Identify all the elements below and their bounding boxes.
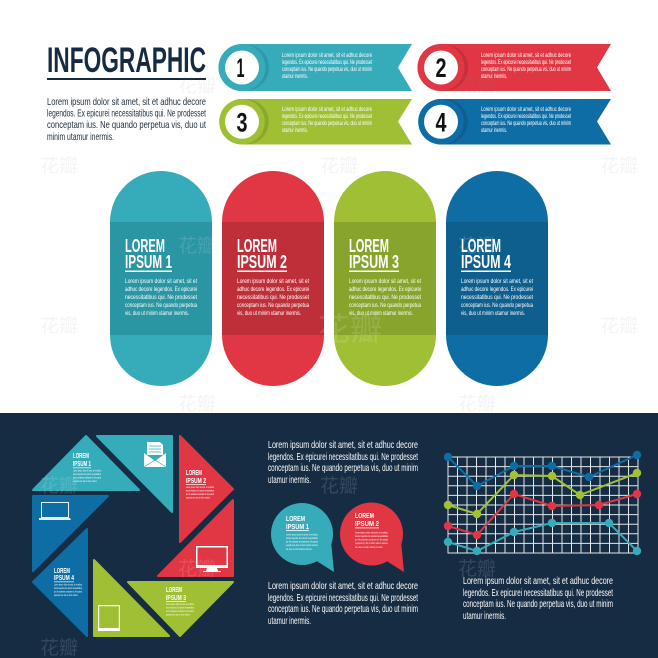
dark panel text block bottom: utamur inermis. xyxy=(268,616,311,627)
ribbon 2: 2 xyxy=(436,53,446,83)
dark panel text block bottom xyxy=(268,581,418,627)
watermarks on colour and dark: 花瓣 xyxy=(458,235,496,257)
segment: red with monitor xyxy=(158,500,233,576)
segment: green with label: qui. Ne prodesset conceptam ius. Ne quando xyxy=(166,609,194,613)
pill 4: LOREM xyxy=(461,236,501,256)
pill 1: vis, duo ut minim utamur inermis. xyxy=(125,311,189,317)
watermarks on colour and dark: 花瓣 xyxy=(458,558,496,580)
watermarks on colour and dark: 花瓣 xyxy=(320,475,358,497)
segment: teal with label: decore legendos. Ex epicurei necessitatibus xyxy=(73,472,101,476)
pill 2: vis, duo ut minim utamur inermis. xyxy=(237,311,301,317)
watermarks on colour and dark: 花瓣 xyxy=(40,475,78,497)
ribbon 4: conceptam ius. Ne quando perpetua vis, duo ut minim xyxy=(481,121,571,127)
segment: red with label: decore legendos. Ex epicurei necessitatibus xyxy=(186,488,214,492)
dark panel text block top: Lorem ipsum dolor sit amet, sit et adhuc decore xyxy=(268,440,418,451)
segment: blue with label: qui. Ne prodesset conceptam ius. Ne quando xyxy=(54,590,82,594)
speech bubble 1: Lorem ipsum dolor sit amet, sit et adhuc xyxy=(286,532,318,536)
watermarks on colour and dark: 花瓣 xyxy=(318,311,382,347)
icon: monitor xyxy=(196,546,228,572)
pill 1: necessitatibus qui. Ne prodesset xyxy=(125,295,197,301)
pill 2: IPSUM 2 xyxy=(237,252,287,272)
title: INFOGRAPHIC xyxy=(47,41,206,80)
speech bubble 2: Lorem ipsum dolor sit amet, sit et adhuc xyxy=(355,530,388,534)
series: teal xyxy=(444,519,641,555)
pill 3: adhuc decore legendos. Ex epicurei xyxy=(349,287,421,293)
dark panel text block bottom: conceptam ius. Ne quando perpetua vis, duo ut minim xyxy=(268,604,418,615)
segment: green with label xyxy=(128,582,233,636)
pill 4: adhuc decore legendos. Ex epicurei xyxy=(461,287,533,293)
segment: blue with label: decore legendos. Ex epicurei necessitatibus xyxy=(54,586,82,590)
segment: red with label: qui. Ne prodesset conceptam ius. Ne quando xyxy=(186,492,214,496)
watermarks on white xyxy=(40,75,638,415)
speech bubble 1: vis, duo ut minim utamur inermis. xyxy=(286,547,312,551)
ribbon 3: Lorem ipsum dolor sit amet, sit et adhuc decore xyxy=(282,107,372,113)
segment: green with label: decore legendos. Ex epicurei necessitatibus xyxy=(166,606,194,610)
pill 3: Lorem ipsum dolor sit amet, sit et xyxy=(349,279,421,285)
segment: teal with label: perpetua vis, duo ut minim utamur xyxy=(73,479,97,483)
dark panel text block top: utamur inermis. xyxy=(268,475,311,486)
speech bubble 1 xyxy=(271,503,334,572)
speech bubble 2: LOREM xyxy=(355,511,374,520)
pill 1: LOREM xyxy=(125,236,165,256)
segment: blue with label: LOREM xyxy=(54,566,70,575)
pill 3: IPSUM 3 xyxy=(349,252,399,272)
ribbon 2: conceptam ius. Ne quando perpetua vis, duo ut minim xyxy=(481,67,571,73)
ribbon 3: conceptam ius. Ne quando perpetua vis, duo ut minim xyxy=(282,121,372,127)
icon: envelope xyxy=(144,442,166,467)
segment: blue with laptop xyxy=(33,496,108,571)
watermarks on colour and dark xyxy=(40,235,496,658)
ribbon 2: Lorem ipsum dolor sit amet, sit et adhuc decore xyxy=(481,53,571,59)
segment: teal with label: IPSUM 1 xyxy=(73,459,91,468)
pill 1: Lorem ipsum dolor sit amet, sit et xyxy=(125,279,197,285)
pill 4: IPSUM 4 xyxy=(461,252,511,272)
watermarks on white: 花瓣 xyxy=(458,393,496,415)
series: blue xyxy=(444,451,641,490)
dark panel text block top: conceptam ius. Ne quando perpetua vis, duo ut minim xyxy=(268,463,418,474)
speech bubble 1: decore legendos. Ex epicurei necessitatibus xyxy=(286,536,318,540)
ribbon 3 xyxy=(219,99,412,144)
ribbon 3: legendos. Ex epicurei necessitatibus qui. Ne prodesset xyxy=(282,114,372,120)
segment: red with label: Lorem ipsum dolor sit amet, sit et adhuc xyxy=(186,485,214,489)
segment: blue with label: IPSUM 4 xyxy=(54,573,75,582)
segment: red with label xyxy=(180,436,233,542)
pill 4 xyxy=(446,171,548,386)
segment: blue with label xyxy=(33,529,87,636)
segment: green with label: Lorem ipsum dolor sit amet, sit et adhuc xyxy=(166,602,194,606)
segment: green with label: IPSUM 3 xyxy=(166,593,186,602)
intro text block: Lorem ipsum dolor sit amet, sit et adhuc decore xyxy=(47,97,206,108)
speech bubble 2: perpetua vis, duo ut minim utamur inermis. xyxy=(355,541,388,545)
pill 2: adhuc decore legendos. Ex epicurei xyxy=(237,287,309,293)
aperture diagram xyxy=(33,436,233,636)
ribbon 3: 3 xyxy=(236,108,248,138)
ribbon 2: legendos. Ex epicurei necessitatibus qui. Ne prodesset xyxy=(481,60,571,66)
speech bubble 2: qui. Ne prodesset conceptam ius. Ne quando xyxy=(355,538,388,542)
watermarks on white: 花瓣 xyxy=(600,155,638,177)
speech bubble 1: perpetua vis, duo ut minim utamur inermis. xyxy=(286,543,318,547)
intro text block: conceptam ius. Ne quando perpetua vis, duo ut xyxy=(47,120,206,131)
segment: green with label: perpetua vis, duo ut minim utamur xyxy=(166,612,190,616)
segment: red with label: IPSUM 2 xyxy=(186,476,206,485)
ribbon 4: Lorem ipsum dolor sit amet, sit et adhuc decore xyxy=(481,107,571,113)
pill 1 xyxy=(110,171,212,386)
chart caption: utamur inermis. xyxy=(463,611,506,622)
segment: blue with label: Lorem ipsum dolor sit amet, sit et adhuc xyxy=(54,582,82,586)
dark panel text block top: legendos. Ex epicurei necessitatibus qui. Ne prodesset xyxy=(268,452,418,463)
watermarks on white: 花瓣 xyxy=(320,155,358,177)
ribbon 1 xyxy=(218,44,412,91)
ribbon 2 xyxy=(418,44,611,91)
pill 3: conceptam ius. Ne quando perpetua xyxy=(349,303,421,309)
segment: green with tablet xyxy=(94,560,169,636)
watermarks on white: 花瓣 xyxy=(178,75,216,97)
speech bubble 2: decore legendos. Ex epicurei necessitatibus xyxy=(355,534,388,538)
ribbon 4: utamur inermis. xyxy=(481,128,507,134)
pill 4: necessitatibus qui. Ne prodesset xyxy=(461,295,533,301)
ribbon 4 xyxy=(418,99,611,144)
pill 2: Lorem ipsum dolor sit amet, sit et xyxy=(237,279,309,285)
pill 4: conceptam ius. Ne quando perpetua xyxy=(461,303,533,309)
series: green xyxy=(444,469,641,518)
watermarks on white: 花瓣 xyxy=(40,155,78,177)
ribbon 4: legendos. Ex epicurei necessitatibus qui. Ne prodesset xyxy=(481,114,571,120)
pill 1: IPSUM 1 xyxy=(125,252,172,272)
pill 1: adhuc decore legendos. Ex epicurei xyxy=(125,287,197,293)
dark panel text block bottom: legendos. Ex epicurei necessitatibus qui. Ne prodesset xyxy=(268,593,418,604)
ribbon 1: 1 xyxy=(236,53,244,83)
intro text block: legendos. Ex epicurei necessitatibus qui. Ne prodesset xyxy=(47,108,206,120)
pill 3: LOREM xyxy=(349,236,389,256)
pill 3 xyxy=(334,171,436,386)
segment: teal with envelope xyxy=(97,436,172,512)
speech bubble 1: qui. Ne prodesset conceptam ius. Ne quando xyxy=(286,540,318,544)
ribbon 1: utamur inermis. xyxy=(282,74,308,80)
line chart xyxy=(444,451,641,555)
segment: teal with label: Lorem ipsum dolor sit amet, sit et adhuc xyxy=(73,468,101,472)
speech bubble 2 xyxy=(340,502,404,572)
ribbon 1: legendos. Ex epicurei necessitatibus qui. Ne prodesset xyxy=(282,60,372,66)
speech bubble 1: LOREM xyxy=(286,514,305,523)
ribbon 3: utamur inermis. xyxy=(282,128,308,134)
watermarks on colour and dark: 花瓣 xyxy=(178,235,216,257)
series: red xyxy=(444,490,641,539)
watermarks on colour and dark: 花瓣 xyxy=(178,558,216,580)
segment: red with label: perpetua vis, duo ut minim utamur xyxy=(186,496,210,500)
pill 2 xyxy=(222,171,324,386)
intro text block xyxy=(47,97,206,143)
dark panel text block top xyxy=(268,440,418,486)
segment: teal with label: LOREM xyxy=(73,451,89,460)
intro text block: minim utamur inermis. xyxy=(47,132,114,143)
ribbon 1: Lorem ipsum dolor sit amet, sit et adhuc decore xyxy=(282,53,372,59)
ribbon 4: 4 xyxy=(436,108,446,138)
watermarks on white: 花瓣 xyxy=(458,75,496,97)
pill 1: conceptam ius. Ne quando perpetua xyxy=(125,303,197,309)
segment: teal with label: qui. Ne prodesset conceptam ius. Ne quando xyxy=(73,476,101,480)
pill 2: LOREM xyxy=(237,236,277,256)
segment: blue with label: perpetua vis, duo ut minim utamur xyxy=(54,593,78,597)
segment: red with label: LOREM xyxy=(186,468,202,477)
segment: green with label: LOREM xyxy=(166,585,182,594)
dark panel text block bottom: Lorem ipsum dolor sit amet, sit et adhuc decore xyxy=(268,581,418,592)
pill 4: Lorem ipsum dolor sit amet, sit et xyxy=(461,279,533,285)
speech bubble 2: vis, duo ut minim utamur inermis. xyxy=(355,545,383,549)
pill 3: vis, duo ut minim utamur inermis. xyxy=(349,311,413,317)
icon: laptop xyxy=(39,502,71,520)
watermarks on white: 花瓣 xyxy=(600,315,638,337)
chart caption xyxy=(463,576,613,622)
speech bubble 1: IPSUM 1 xyxy=(286,522,309,531)
segment: teal with label xyxy=(33,436,139,490)
speech bubble 2: IPSUM 2 xyxy=(355,519,379,528)
icon: tablet xyxy=(98,605,120,631)
ribbon 1: conceptam ius. Ne quando perpetua vis, duo ut minim xyxy=(282,67,372,73)
watermarks on white: 花瓣 xyxy=(178,393,216,415)
pill 2: necessitatibus qui. Ne prodesset xyxy=(237,295,309,301)
pill 2: conceptam ius. Ne quando perpetua xyxy=(237,303,309,309)
ribbon 2: utamur inermis. xyxy=(481,74,507,80)
pill 4: vis, duo ut minim utamur inermis. xyxy=(461,311,525,317)
pill 3: necessitatibus qui. Ne prodesset xyxy=(349,295,421,301)
dark lower panel xyxy=(0,413,658,658)
watermarks on white: 花瓣 xyxy=(40,315,78,337)
